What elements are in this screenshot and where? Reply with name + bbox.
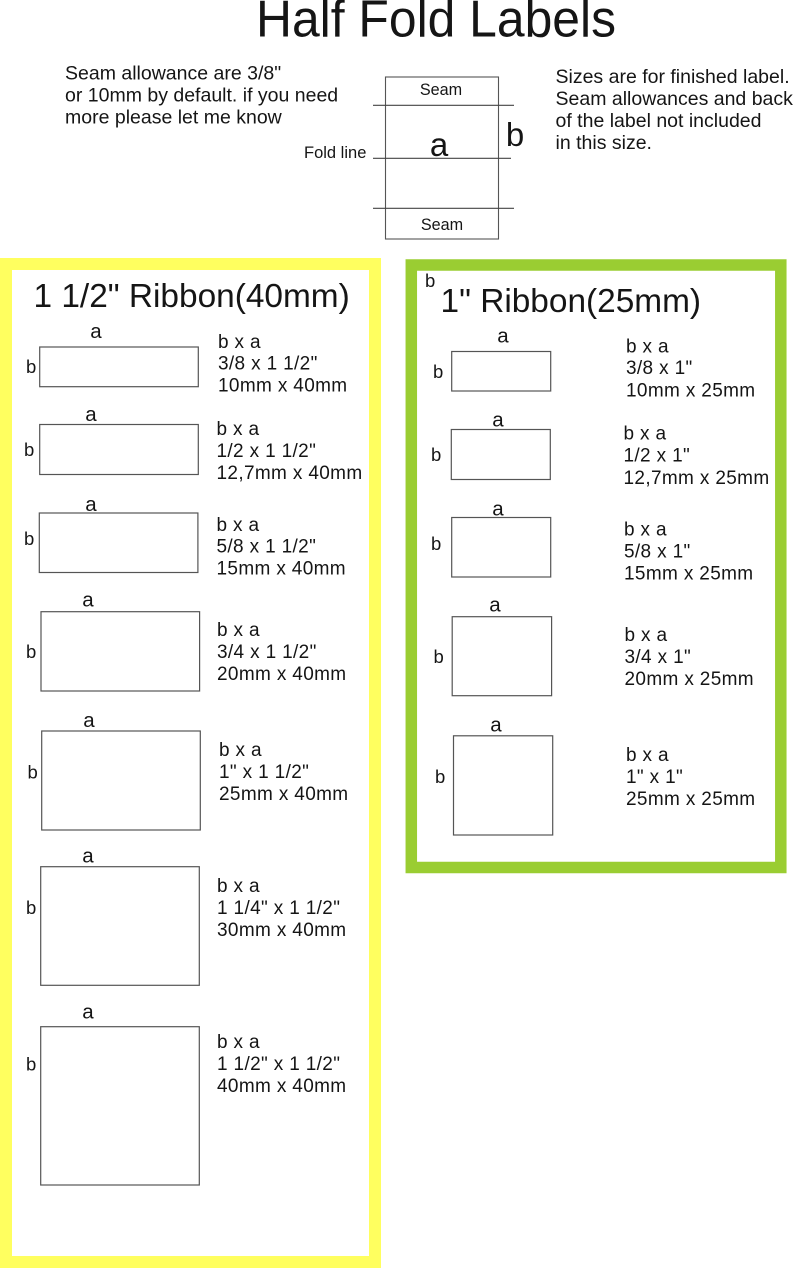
text block: sizes note: Seam allowances and back [556, 88, 793, 110]
label size 1 x 1 1/2: 1" x 1 1/2" [219, 762, 309, 783]
label size 3/8 x 1 [433, 324, 755, 402]
label size 1 x 1: b x a [626, 745, 669, 766]
label size 3/8 x 1: 10mm x 25mm [626, 380, 755, 402]
label size 1 x 1 1/2: b x a [219, 740, 262, 761]
label size 3/8 x 1 1/2: a [90, 320, 102, 343]
label size 1 1/4 x 1 1/2: b x a [217, 876, 260, 897]
label size 3/8 x 1: 3/8 x 1" [626, 358, 693, 379]
label size 1/2 x 1 1/2: 1/2 x 1 1/2" [216, 441, 316, 462]
label size 1 x 1 1/2: b [28, 762, 38, 782]
label size 1/2 x 1 [431, 408, 770, 489]
label size 3/4 x 1 1/2: 3/4 x 1 1/2" [217, 642, 317, 663]
label size 1 x 1 1/2 [28, 709, 348, 830]
heading: 1 1/2" Ribbon(40mm) [34, 278, 350, 315]
label size 1 1/4 x 1 1/2: b [26, 897, 36, 918]
label size 1/2 x 1: b x a [624, 424, 667, 444]
label size 3/4 x 1 1/2: b x a [217, 620, 260, 641]
label size 1 x 1: b [435, 766, 445, 787]
label size 1/2 x 1: a [492, 408, 504, 432]
text block: sizes note: in this size. [556, 132, 652, 154]
label size 1/2 x 1 1/2: b x a [216, 419, 260, 440]
label size 3/8 x 1: b [433, 361, 443, 382]
label size 5/8 x 1 1/2: 5/8 x 1 1/2" [216, 536, 316, 558]
label size 1 1/4 x 1 1/2 [26, 844, 346, 985]
label size 1 x 1 [435, 714, 755, 835]
text block: seam allowance note: or 10mm by default. if you need [65, 84, 338, 106]
label size 3/8 x 1 1/2 [26, 320, 347, 396]
label size 3/8 x 1 1/2: 10mm x 40mm [218, 376, 347, 396]
diagram: fold and seam [304, 77, 524, 239]
label size 3/8 x 1 1/2: 3/8 x 1 1/2" [218, 354, 318, 374]
label size 1/2 x 1 1/2 [24, 403, 363, 484]
label size 1 x 1: a [490, 714, 502, 736]
label size 5/8 x 1 [431, 498, 753, 584]
label size 1 1/2 x 1 1/2 [26, 1000, 346, 1185]
label size 1 x 1 1/2: 25mm x 40mm [219, 784, 348, 805]
label size 5/8 x 1: a [492, 498, 504, 520]
label size 1 1/4 x 1 1/2: a [82, 844, 94, 868]
label size 1/2 x 1 1/2: a [85, 403, 97, 426]
label size 3/4 x 1: b x a [624, 625, 668, 646]
text block: seam allowance note: more please let me know [65, 106, 283, 128]
label size 5/8 x 1: b x a [624, 520, 667, 540]
label size 5/8 x 1: 5/8 x 1" [624, 542, 691, 562]
diagram: fold and seam: Seam [421, 216, 463, 234]
label size 3/8 x 1: b x a [626, 336, 669, 358]
label size 1 1/2 x 1 1/2: 40mm x 40mm [217, 1076, 346, 1097]
text block: sizes note: of the label not included [556, 110, 762, 132]
label size 1 x 1: 1" x 1" [626, 767, 683, 788]
label size 1/2 x 1: 1/2 x 1" [624, 446, 690, 466]
label size 1/2 x 1: b [431, 444, 441, 465]
label size 1/2 x 1 1/2: b [24, 439, 34, 460]
label size 3/4 x 1 1/2: a [82, 588, 94, 612]
label size 3/4 x 1 1/2 [26, 588, 346, 691]
label size 5/8 x 1 1/2: 15mm x 40mm [216, 558, 346, 580]
label size 5/8 x 1 1/2: b x a [216, 515, 260, 536]
label size 1 1/4 x 1 1/2: 30mm x 40mm [217, 920, 346, 941]
diagram: fold and seam: b [506, 116, 524, 153]
label size 5/8 x 1: 15mm x 25mm [624, 564, 753, 584]
heading: 1" Ribbon(25mm) [440, 283, 701, 320]
label size 3/4 x 1: 3/4 x 1" [624, 647, 691, 668]
label size 3/8 x 1 1/2: b x a [218, 332, 261, 353]
label size 1 1/2 x 1 1/2: b x a [217, 1032, 260, 1053]
text block: seam allowance note: Seam allowance are 3/8" [65, 62, 281, 84]
diagram: fold and seam: a [430, 126, 449, 163]
stray b label: b [425, 270, 435, 291]
text block: sizes note: Sizes are for finished label. [556, 66, 790, 88]
label size 1/2 x 1: 12,7mm x 25mm [624, 468, 770, 489]
label size 3/4 x 1 1/2: 20mm x 40mm [217, 664, 346, 685]
label size 5/8 x 1: b [431, 533, 441, 554]
label size 3/4 x 1 1/2: b [26, 641, 36, 662]
label size 1 1/4 x 1 1/2: 1 1/4" x 1 1/2" [217, 898, 340, 919]
panel: 1 inch ribbon [411, 265, 781, 868]
label size 1 x 1: 25mm x 25mm [626, 789, 755, 810]
label size 1 1/2 x 1 1/2: a [82, 1000, 94, 1024]
label size 3/4 x 1: a [489, 594, 501, 616]
label size 1 1/2 x 1 1/2: b [26, 1054, 36, 1074]
label size 3/4 x 1: b [434, 646, 444, 667]
label size 3/4 x 1 [434, 594, 754, 696]
text block: seam allowance note [65, 62, 338, 128]
label size 5/8 x 1 1/2 [24, 493, 346, 580]
label size 5/8 x 1 1/2: b [24, 528, 34, 549]
text block: sizes note [556, 66, 793, 154]
diagram: fold and seam: Seam [420, 81, 462, 99]
diagram: fold and seam: Fold line [304, 144, 366, 162]
label size 1 x 1 1/2: a [83, 709, 95, 732]
label size 1/2 x 1 1/2: 12,7mm x 40mm [216, 463, 363, 484]
label size 3/4 x 1: 20mm x 25mm [624, 669, 754, 690]
label size 3/8 x 1: a [497, 324, 509, 348]
label size 3/8 x 1 1/2: b [26, 356, 36, 377]
label size 5/8 x 1 1/2: a [85, 493, 97, 516]
label size 1 1/2 x 1 1/2: 1 1/2" x 1 1/2" [217, 1054, 340, 1075]
panel: 1 1/2 inch ribbon [6, 264, 375, 1262]
